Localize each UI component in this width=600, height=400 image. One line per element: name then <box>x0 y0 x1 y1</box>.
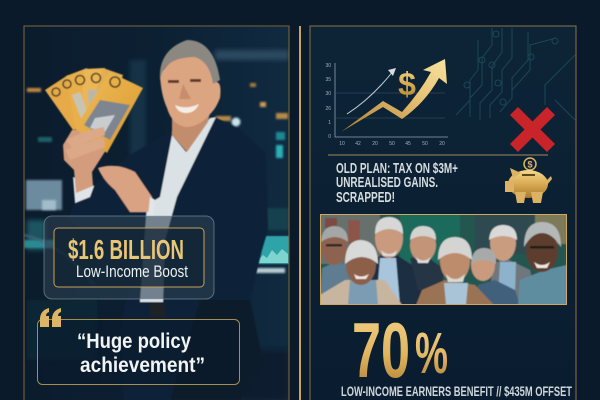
icon: piggy bank with coin <box>505 158 552 203</box>
y axis labels: 30 <box>325 91 331 97</box>
icon: piggy bank with coin: $ <box>527 160 533 170</box>
man: jacket shading <box>170 300 263 400</box>
man figure <box>45 40 268 400</box>
text: old plan: SCRAPPED! <box>336 189 395 206</box>
x axis labels: 50 <box>389 141 395 147</box>
big stat: 70 percent: % <box>415 321 448 386</box>
man: suit jacket <box>68 117 268 400</box>
stat card: gold inner frame <box>54 228 204 287</box>
y axis labels: 1 <box>328 120 331 126</box>
big stat: 70 percent: 70 <box>352 306 410 394</box>
man: lower hand <box>98 166 153 212</box>
panel: right column <box>310 26 576 400</box>
photo: group of older people <box>320 214 567 305</box>
street backdrop <box>321 215 566 288</box>
man: belt <box>150 303 165 317</box>
woman right <box>471 248 520 305</box>
person back centre <box>410 226 445 290</box>
text: old plan: OLD PLAN: TAX ON $3M+ <box>336 160 458 177</box>
x axis labels: 45 <box>405 141 411 147</box>
icon: red cross <box>510 107 555 152</box>
right panel gold frame <box>310 26 576 400</box>
man: eyes, nose and smile <box>168 79 201 113</box>
man: neck <box>172 112 210 152</box>
y axis labels <box>325 63 331 140</box>
x axis labels: 20 <box>439 141 445 147</box>
man front centre <box>416 237 494 305</box>
white arrow head <box>388 68 396 76</box>
y axis labels: 35 <box>325 77 331 83</box>
chart: dollar growth <box>325 59 448 147</box>
gold growth arrow <box>341 59 447 132</box>
man: hair <box>160 40 220 84</box>
banknotes fan <box>45 68 143 153</box>
chart grid lines <box>335 93 445 118</box>
person far right <box>518 222 567 305</box>
divider line <box>328 154 548 156</box>
office background <box>24 27 289 400</box>
icon: gold quotation mark <box>40 308 61 327</box>
stat value: $1.6 BILLION <box>68 234 184 265</box>
circuit pattern <box>456 28 575 120</box>
stat label: Low-Income Boost <box>76 262 188 281</box>
photo frame <box>320 214 566 304</box>
quote box <box>38 320 240 384</box>
x axis labels: 50 <box>422 141 428 147</box>
y axis labels: 26 <box>325 106 331 112</box>
woman front left <box>320 240 402 305</box>
x axis labels: 20 <box>372 141 378 147</box>
text: old plan: UNREALISED GAINS. <box>336 174 438 191</box>
right panel background <box>310 26 576 400</box>
person tall left <box>371 216 422 304</box>
man: forearm and hand <box>63 127 106 193</box>
stat card: glass outer panel <box>44 216 214 299</box>
quote text: achievement” <box>80 354 205 377</box>
man: fingers over notes <box>65 127 105 160</box>
thin white trend arrow <box>347 70 394 114</box>
centre gold divider <box>299 26 301 400</box>
quote text: “Huge policy <box>77 330 191 353</box>
man: white shirt <box>140 117 216 302</box>
chart axes <box>335 63 448 137</box>
x axis labels: 42 <box>355 141 361 147</box>
man: raised arm cuff <box>73 177 94 203</box>
x axis labels: 10 <box>339 141 345 147</box>
x axis labels <box>339 141 445 147</box>
dollar sign: $ <box>398 66 416 102</box>
man: face <box>160 56 220 127</box>
panel: minister photo scene <box>24 27 289 400</box>
person right back <box>488 224 532 300</box>
person far left <box>321 225 352 295</box>
y axis labels: 0 <box>328 134 331 140</box>
left panel gold frame <box>24 26 289 400</box>
text: old plan <box>336 160 458 206</box>
y axis labels: 30 <box>325 63 331 69</box>
man: lower cuff <box>148 196 156 212</box>
